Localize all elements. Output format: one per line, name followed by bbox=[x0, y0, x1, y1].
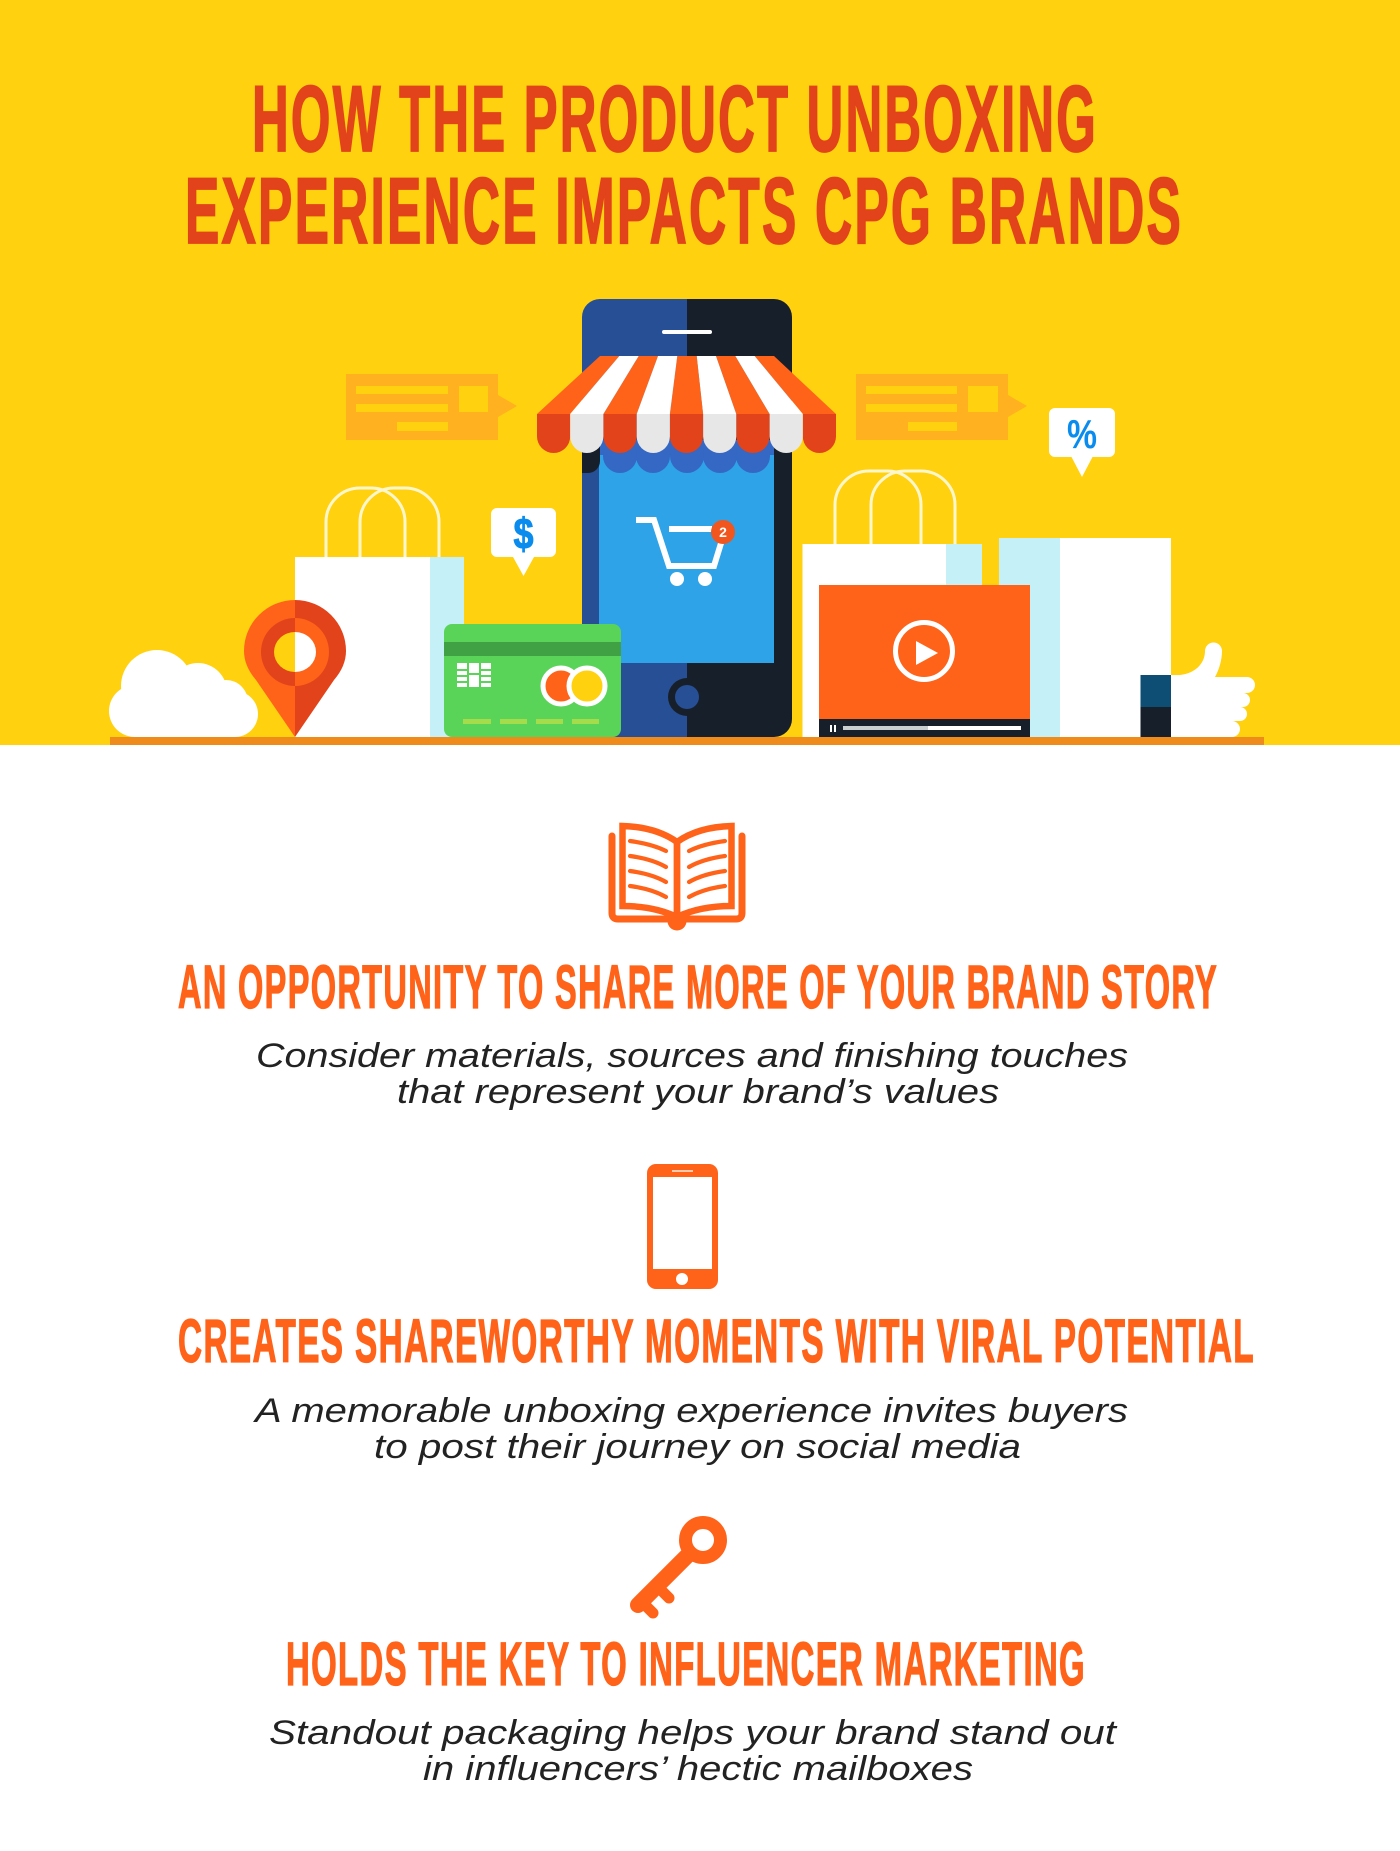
body text: in influencers’ hectic mailboxes bbox=[423, 1750, 973, 1788]
icon: credit card bbox=[444, 624, 621, 737]
icon: cloud bbox=[109, 650, 258, 737]
icon: shopping cart with badge bbox=[636, 520, 735, 586]
ground bar bbox=[110, 737, 1264, 745]
awning bbox=[537, 356, 836, 453]
section: influencer marketing bbox=[269, 1522, 1118, 1788]
body text: that represent your brand’s values bbox=[397, 1073, 999, 1111]
icon: faded chat bubble right bbox=[856, 374, 1027, 440]
icon: location pin bbox=[244, 600, 346, 737]
icon: shopping bag left bbox=[295, 488, 464, 737]
body text bbox=[253, 1392, 1128, 1466]
title bbox=[185, 66, 1183, 263]
icon: percent bubble: % bbox=[1067, 411, 1097, 457]
body text bbox=[269, 1714, 1118, 1788]
icon: shopping bag right bbox=[802, 471, 982, 737]
body text: A memorable unboxing experience invites buyers bbox=[253, 1392, 1128, 1430]
icon: shopping cart with badge: 2 bbox=[719, 524, 727, 540]
body text: Consider materials, sources and finishing touches bbox=[256, 1037, 1128, 1075]
icon: video player bbox=[819, 585, 1030, 737]
body text: to post their journey on social media bbox=[374, 1428, 1021, 1466]
hero banner background bbox=[0, 0, 1400, 745]
icon: white box bbox=[999, 538, 1171, 737]
icon: phone outline bbox=[647, 1164, 718, 1289]
icon: dollar bubble bbox=[491, 508, 556, 576]
section: viral potential bbox=[178, 1164, 1255, 1466]
awning scallop shadow bbox=[582, 439, 774, 473]
icon: thumbs up bbox=[1140, 642, 1255, 737]
body text bbox=[256, 1037, 1128, 1111]
icon: smartphone storefront bbox=[537, 299, 836, 737]
icon: percent bubble bbox=[1049, 408, 1115, 477]
body text: Standout packaging helps your brand stand out bbox=[269, 1714, 1118, 1752]
phone body bbox=[582, 299, 792, 737]
icon: faded chat bubble left bbox=[346, 374, 517, 440]
icon: open book bbox=[612, 826, 742, 930]
icon: key bbox=[638, 1522, 720, 1613]
icon: dollar bubble: $ bbox=[514, 510, 534, 559]
section: brand story bbox=[178, 826, 1218, 1111]
